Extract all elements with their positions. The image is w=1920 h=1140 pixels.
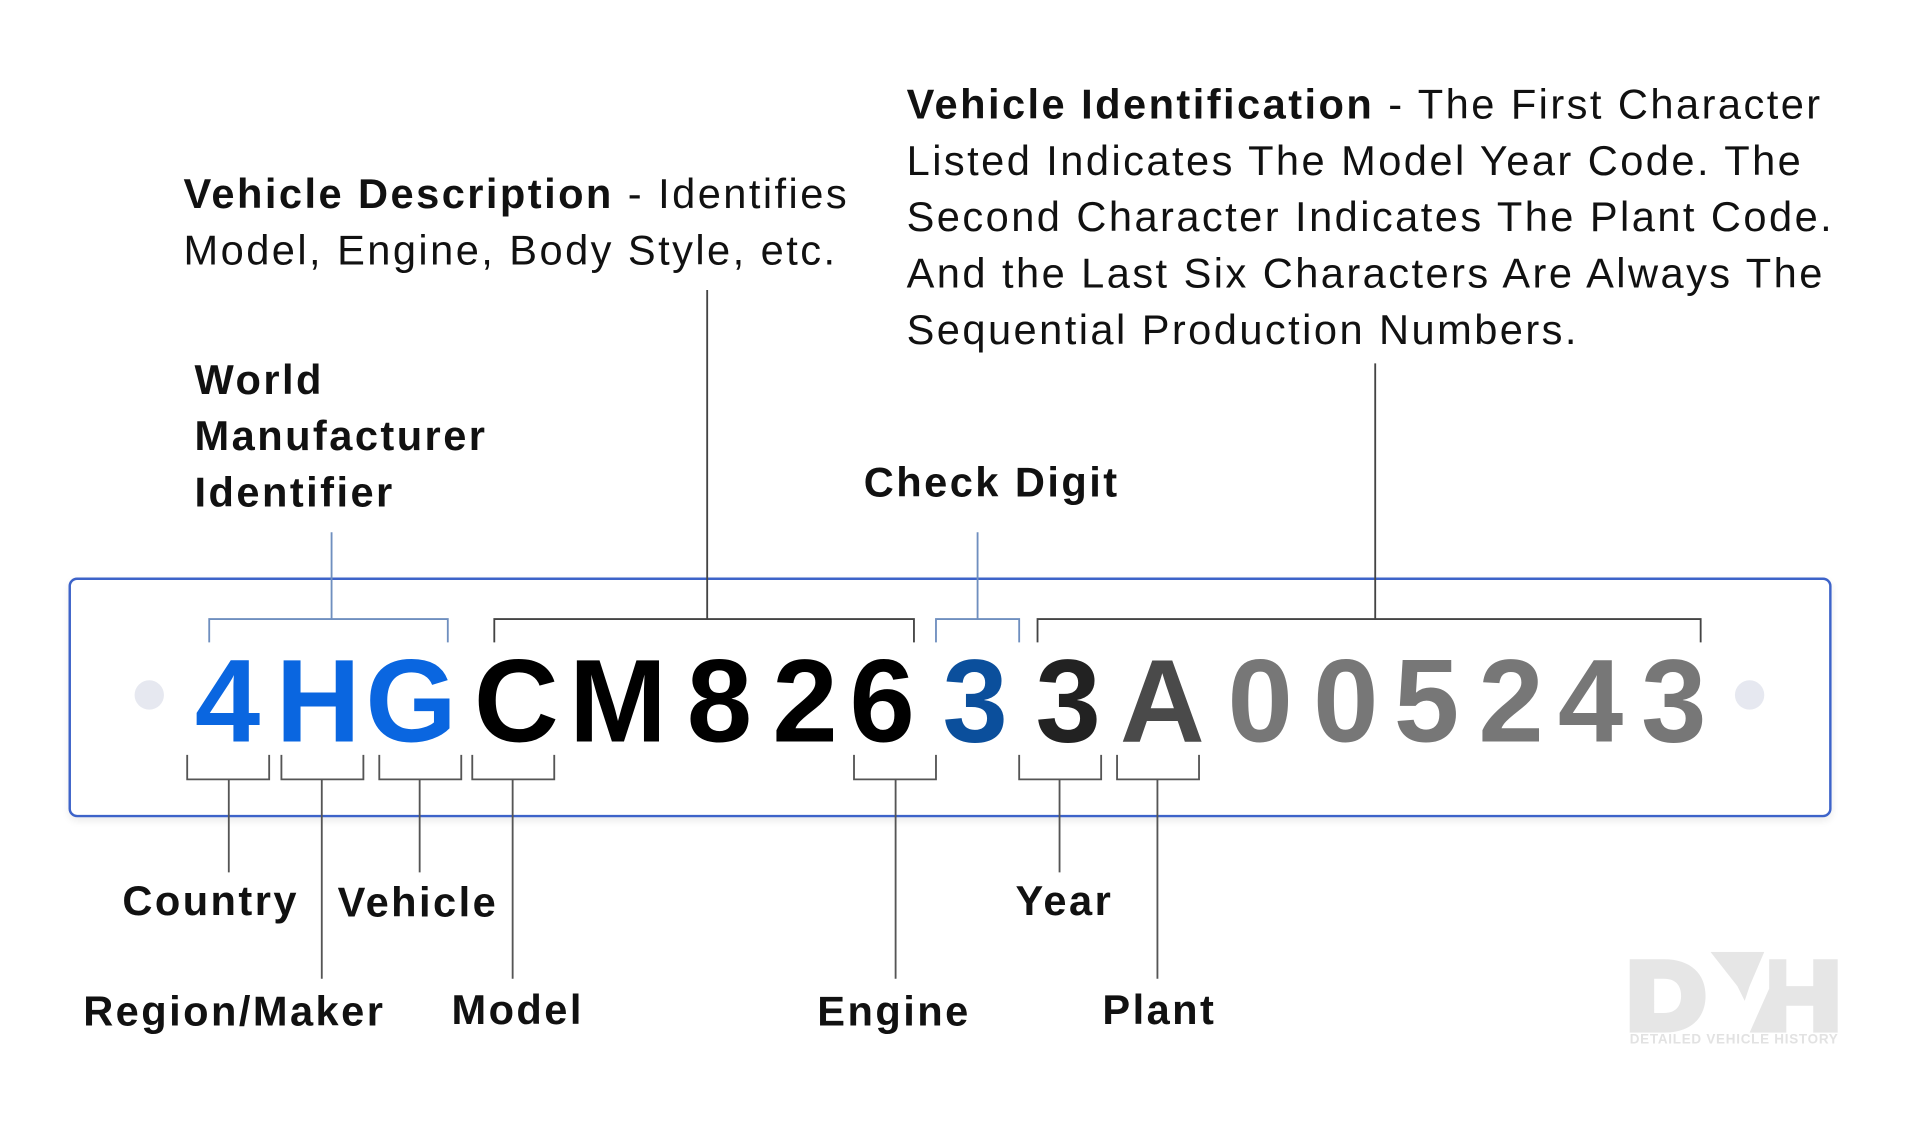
label: engine: Engine — [817, 989, 971, 1035]
VIN characters: 2 — [1478, 636, 1544, 767]
label: check digit: Check Digit — [864, 460, 1120, 507]
label: region/maker: Region/Maker — [83, 989, 385, 1035]
VIN characters: A — [1120, 636, 1205, 767]
VIN characters: M — [569, 636, 667, 767]
VIN characters: G — [365, 636, 457, 767]
heading: vehicle identification: Sequential Production Numbers. — [907, 307, 1579, 354]
heading: vehicle identification: Listed Indicates The Model Year Code. The — [907, 138, 1803, 185]
heading: vehicle identification: Second Character Indicates The Plant Code. — [907, 195, 1834, 241]
label: vehicle: Vehicle — [338, 880, 498, 926]
label: country: Country — [122, 878, 299, 925]
heading: world manufacturer identifier: World — [195, 357, 324, 404]
label: plant: Plant — [1102, 987, 1216, 1034]
VIN characters: 2 — [772, 636, 838, 767]
VIN characters: 5 — [1394, 636, 1459, 767]
VIN characters: H — [276, 636, 361, 767]
heading: world manufacturer identifier: Manufacturer — [195, 414, 487, 460]
label: year: Year — [1016, 878, 1113, 925]
VIN characters — [195, 636, 1706, 767]
heading: world manufacturer identifier — [194, 357, 487, 516]
heading: vehicle description — [184, 171, 849, 274]
VIN characters: 4 — [1558, 636, 1623, 767]
VIN characters: 3 — [1035, 636, 1101, 767]
VIN characters: 0 — [1313, 636, 1379, 767]
heading: world manufacturer identifier: Identifier — [195, 470, 395, 516]
VIN characters: 3 — [942, 636, 1008, 767]
VIN characters: 4 — [195, 636, 260, 767]
heading: vehicle identification: Vehicle Identification - The First Character — [907, 82, 1823, 128]
VIN characters: 8 — [687, 636, 752, 767]
heading: vehicle description: Model, Engine, Body Style, etc. — [184, 228, 837, 274]
VIN characters: 3 — [1641, 636, 1706, 767]
VIN characters: 0 — [1228, 636, 1293, 767]
heading: vehicle description: Vehicle Description - Identifies — [184, 171, 849, 218]
VIN characters: C — [474, 636, 559, 767]
VIN characters: 6 — [849, 636, 915, 767]
logo: DVH: DETAILED VEHICLE HISTORY — [1630, 1033, 1838, 1047]
label: model: Model — [451, 987, 584, 1034]
panel: VIN plate — [69, 577, 1832, 817]
logo: DVH — [1630, 952, 1838, 1047]
heading: vehicle identification: And the Last Six Characters Are Always The — [907, 251, 1825, 297]
heading: vehicle identification — [906, 82, 1834, 354]
